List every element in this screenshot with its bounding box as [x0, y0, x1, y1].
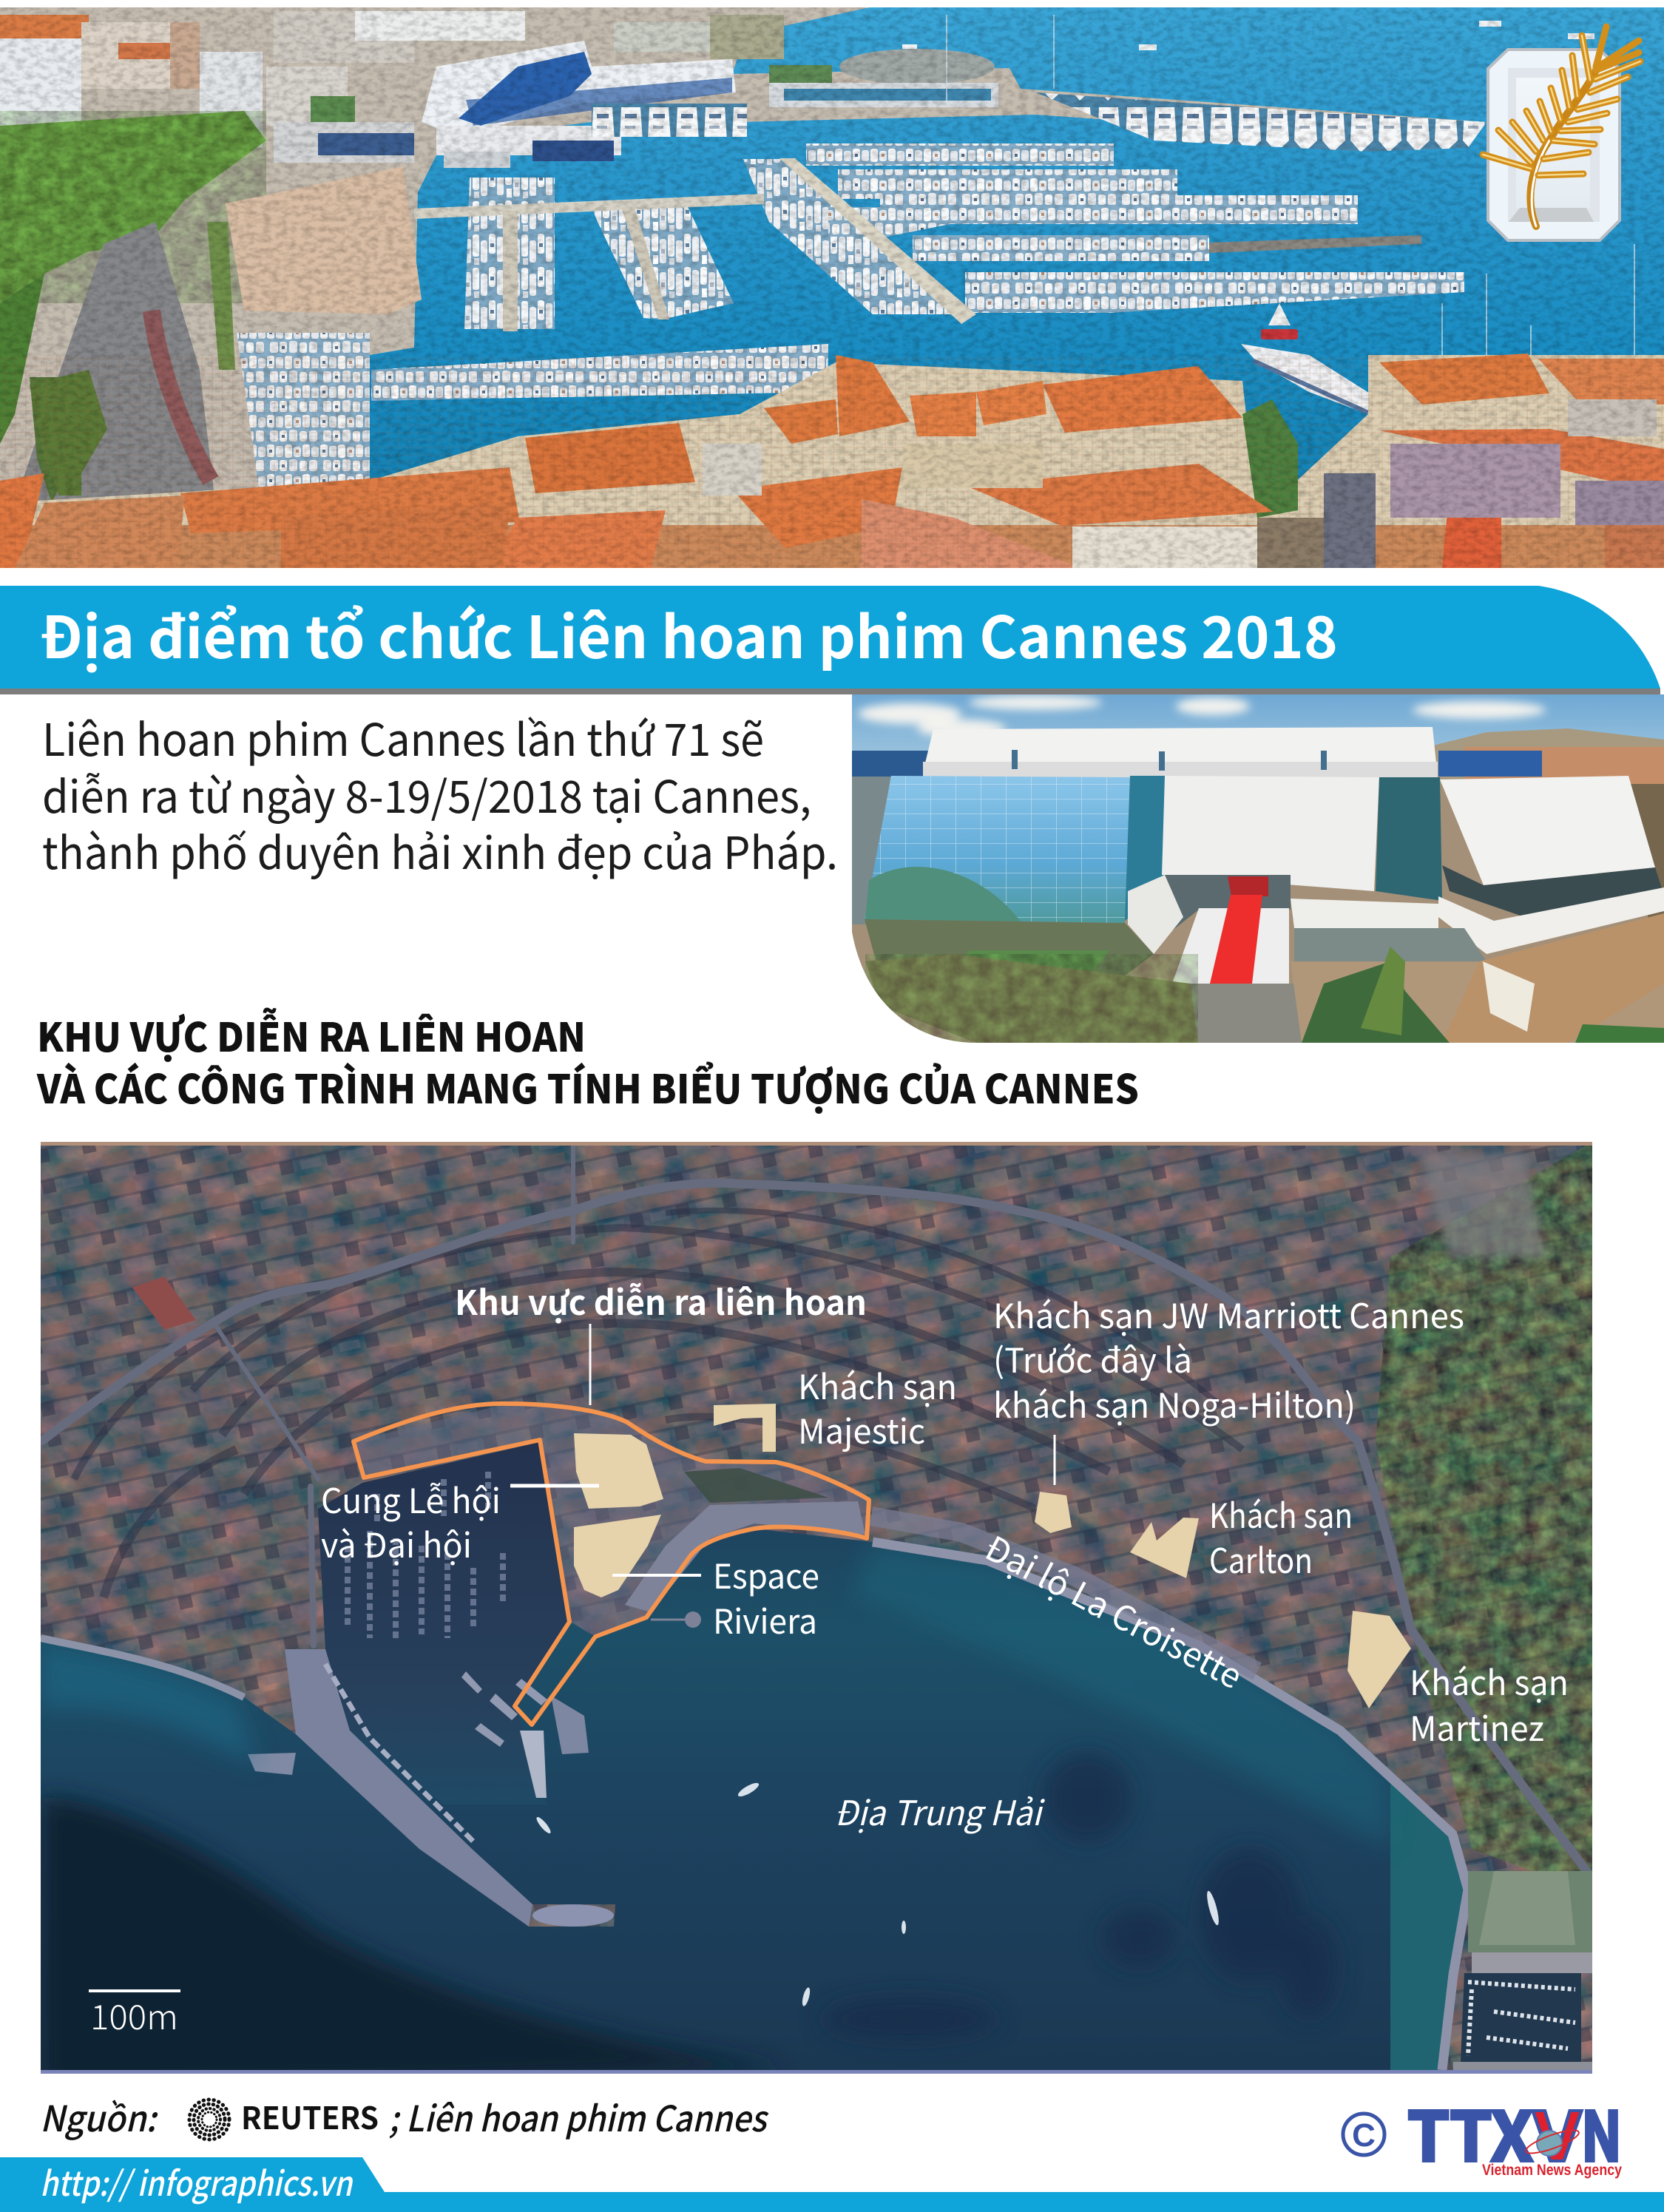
map labels: Khách sạn: [798, 1361, 957, 1410]
logo: TTXVN: N: [1581, 2083, 1622, 2181]
map labels: Khách sạn: [1410, 1657, 1569, 1705]
satellite map: [41, 1142, 1594, 2093]
logo: TTXVN: TTX: [1407, 2083, 1533, 2181]
harbour water: [318, 1442, 569, 1805]
intro text: diễn ra từ ngày 8-19/5/2018 tại Cannes,: [42, 762, 811, 826]
building photo: Palais des Festivals: [852, 694, 1664, 1043]
logo: TTXVN: Vietnam News Agency: [1482, 2162, 1622, 2179]
icon: golden palm on crystal: [1483, 27, 1640, 240]
map labels: Majestic: [798, 1405, 925, 1454]
logo: TTXVN: C: [1352, 2117, 1376, 2154]
map labels: Địa Trung Hải: [834, 1787, 1045, 1836]
teal shallow strip: [1390, 1779, 1468, 2070]
map labels: Espace: [713, 1550, 819, 1599]
map labels: Đại lộ La Croisette: [977, 1522, 1251, 1699]
shallow west coast: [41, 1646, 259, 1768]
festival peninsula: [353, 1404, 869, 1637]
main roads: [42, 1142, 1592, 1878]
logo: TTXVN: [1343, 2083, 1622, 2181]
highlighted buildings: [574, 1404, 1411, 1708]
top buildings: [0, 11, 998, 148]
map labels: Khu vực diễn ra liên hoan: [455, 1276, 867, 1325]
Mediterranean sea: [41, 1442, 1468, 2070]
green eastern hills: [1368, 1142, 1592, 1889]
green tree: [1242, 399, 1298, 518]
intro text: [42, 705, 838, 882]
map labels: Martinez: [1410, 1702, 1544, 1751]
map labels: Riviera: [713, 1595, 817, 1644]
yacht rows top: [592, 104, 747, 137]
riviera pier dot: [685, 1611, 701, 1628]
west harbour quay: [285, 1649, 532, 1927]
footer bar with URL: http:// infographics.vn: [40, 2157, 354, 2206]
source line: ; Liên hoan phim Cannes: [389, 2090, 769, 2142]
trees promenade: [0, 111, 266, 303]
map labels: [321, 1276, 1569, 1836]
source line: Nguồn:: [40, 2090, 158, 2142]
orange roofs: [0, 354, 1664, 568]
dark deep water corner: [41, 1797, 796, 2093]
map labels: Khách sạn: [1209, 1489, 1353, 1538]
map labels: Khách sạn JW Marriott Cannes: [993, 1290, 1464, 1339]
icon: Reuters dotted logo: [189, 2100, 229, 2140]
building-row arcs: [74, 1211, 1242, 1597]
eastern gardens and marina: [1453, 1871, 1594, 2071]
old town walls: [0, 355, 1664, 568]
open sea small boats: [902, 21, 1594, 50]
source line: [40, 2090, 769, 2142]
intro text: thành phố duyên hải xinh đẹp của Pháp.: [42, 818, 838, 882]
section heading: [36, 1005, 1139, 1115]
footer bar with URL: [0, 2157, 1664, 2212]
leader lines: [510, 1324, 1055, 1575]
road: [15, 222, 214, 503]
logo: TTXVN: V: [1532, 2083, 1582, 2181]
boats at sea: [535, 1781, 1221, 2007]
intro text: Liên hoan phim Cannes lần thứ 71 sẽ: [42, 705, 764, 769]
sailboat and big yacht: [1268, 303, 1291, 325]
hero photo: Cannes marina: [0, 7, 1664, 568]
building walls: [703, 399, 1664, 568]
scale bar: 100m: [90, 1991, 178, 2040]
west jetty: [248, 1753, 296, 1775]
map labels: khách sạn Noga-Hilton): [993, 1379, 1356, 1428]
quay boats lower left: [237, 333, 370, 488]
beach and coast: [873, 1542, 1468, 2070]
section heading: VÀ CÁC CÔNG TRÌNH MANG TÍNH BIỂU TƯỢNG CỦA CANNES: [36, 1057, 1139, 1115]
map labels: Carlton: [1209, 1535, 1313, 1583]
banner: title: [0, 586, 1660, 694]
seaweed patches: [821, 1753, 1339, 2041]
harbour buildings near plaza: [274, 122, 414, 163]
marina piers and boat rows: [371, 143, 1464, 401]
beige plaza: [226, 166, 422, 314]
banner: title: Địa điểm tổ chức Liên hoan phim Cannes 2018: [40, 592, 1338, 675]
source line: REUTERS: [241, 2094, 379, 2139]
map labels: (Trước đây là: [993, 1334, 1192, 1383]
map labels: và Đại hội: [321, 1519, 472, 1568]
harbour boats: [348, 1472, 503, 1642]
festival zone outline: [354, 1404, 869, 1725]
city land: [0, 7, 1487, 503]
palm tree: [30, 370, 107, 495]
section heading: KHU VỰC DIỄN RA LIÊN HOAN: [37, 1005, 586, 1063]
palm leaves: [1483, 27, 1640, 226]
masts: [947, 15, 1634, 377]
sports field: [132, 1276, 196, 1330]
map labels: Cung Lễ hội: [321, 1475, 501, 1523]
